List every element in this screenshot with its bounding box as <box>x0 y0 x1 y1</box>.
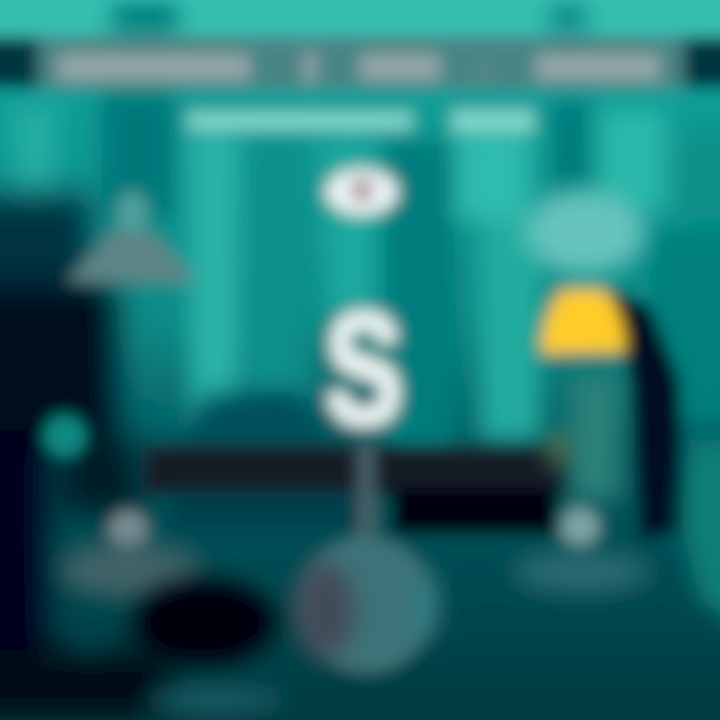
subtitle bar <box>188 110 534 132</box>
icon: top centre badge <box>326 169 398 215</box>
lower right teal glow <box>680 440 720 640</box>
right person body <box>548 375 620 500</box>
icon: right person head <box>525 190 645 274</box>
left dark mass <box>0 195 170 720</box>
icon: dollar sign: S <box>325 279 403 458</box>
icon: left lower figure <box>60 511 285 714</box>
title text bars, illegible in the reference <box>58 52 660 82</box>
central stem <box>358 445 374 540</box>
icon: right person dark back <box>612 290 684 540</box>
icon: yellow shirt <box>542 290 626 354</box>
background light stripes <box>14 0 720 470</box>
icon: large lower circle <box>295 537 437 673</box>
icon: left figure top <box>66 192 198 282</box>
icon: right lower figure <box>514 508 650 592</box>
icon: teal dot at left <box>44 415 86 457</box>
title banner <box>0 36 720 88</box>
central dark table band <box>145 390 570 534</box>
banner dark ends <box>0 38 720 88</box>
